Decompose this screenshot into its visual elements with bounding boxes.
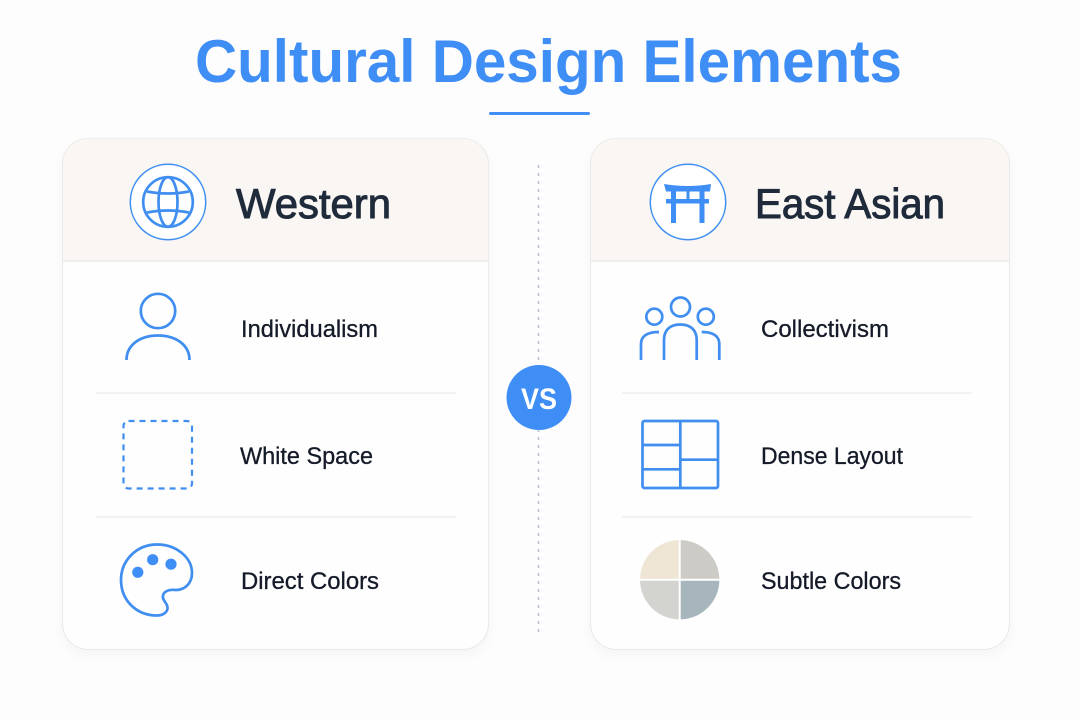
label: Direct Colors: Direct Colors	[241, 568, 379, 595]
label: Dense Layout: Dense Layout	[761, 443, 903, 470]
icon: group of people	[641, 298, 719, 360]
panel header: East Asian	[591, 138, 1009, 261]
icon: dashed square	[124, 421, 192, 488]
item: Direct Colors	[121, 544, 379, 616]
VS badge	[506, 365, 572, 430]
item: Collectivism	[641, 298, 889, 360]
icon: torii gate	[650, 164, 726, 240]
label: Collectivism: Collectivism	[761, 316, 889, 343]
title underline	[489, 112, 590, 115]
item: White Space	[124, 421, 373, 488]
VS badge: VS	[521, 383, 557, 416]
heading: East Asian: East Asian	[755, 180, 945, 227]
icon: globe	[130, 164, 206, 240]
label: White Space: White Space	[240, 443, 373, 470]
panel: East Asian	[590, 138, 1010, 650]
panel header: Western	[63, 138, 488, 261]
item: Subtle Colors	[638, 538, 901, 621]
icon: palette	[121, 544, 192, 616]
title: Cultural Design Elements	[195, 28, 902, 95]
item: Dense Layout	[642, 421, 903, 488]
item: Individualism	[126, 294, 378, 360]
panel: Western	[62, 138, 488, 650]
icon: dense grid	[642, 421, 718, 488]
heading: Western: Western	[236, 180, 391, 227]
label: Individualism: Individualism	[241, 316, 378, 343]
icon: person	[126, 294, 190, 360]
center dotted divider	[538, 165, 540, 636]
icon: muted color wheel	[638, 538, 721, 621]
label: Subtle Colors: Subtle Colors	[761, 568, 901, 595]
